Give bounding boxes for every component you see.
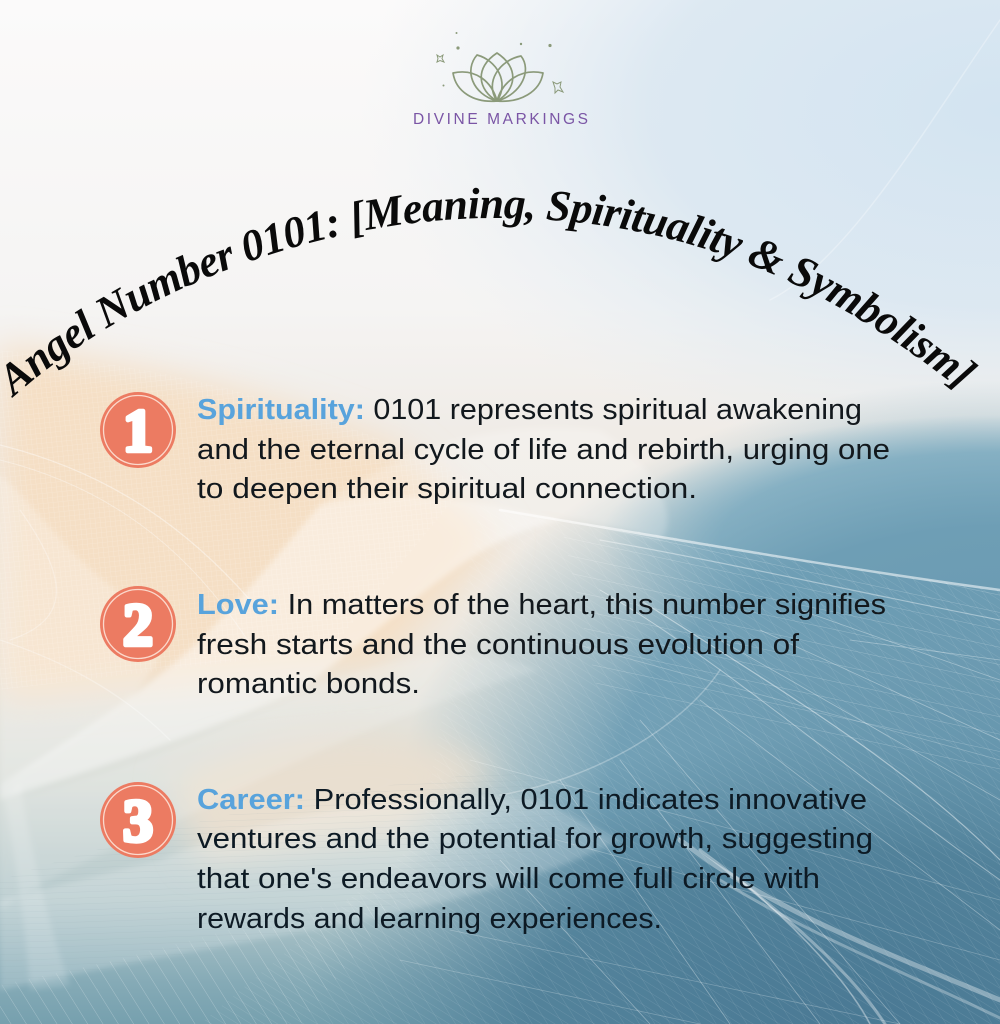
text: career: Career: Professionally, 0101 indicates innovative <box>197 784 824 816</box>
text: love: Love: In matters of the heart, this number signifies <box>197 589 841 621</box>
title on arc: Angel Number 0101: [Meaning, Spirituality & Symbolism] <box>6 188 979 398</box>
item 2: love <box>100 586 894 700</box>
item 1: spirituality <box>100 392 898 505</box>
text: spirituality: and the eternal cycle of life and rebirth, urging one <box>197 434 890 466</box>
text: spirituality: to deepen their spiritual connection. <box>197 473 697 505</box>
text: spirituality: Spirituality: 0101 represents spiritual awakening <box>197 394 829 426</box>
logo wordmark: DIVINE MARKINGS <box>413 111 588 128</box>
badge 2 <box>100 586 176 662</box>
text: love: fresh starts and the continuous evolution of <box>197 629 799 661</box>
grey woven mesh, lower left <box>0 770 620 990</box>
badge 2: 2 <box>123 592 153 658</box>
badge 1: 1 <box>123 398 153 464</box>
logo: Divine Markings <box>413 32 588 128</box>
peach grid texture <box>0 350 470 690</box>
badge 3: 3 <box>123 788 153 854</box>
text: love: romantic bonds. <box>197 668 420 700</box>
icon: sparkles <box>437 32 563 93</box>
badge 3 <box>100 782 176 858</box>
badge 1 <box>100 392 176 468</box>
item 3: career <box>100 782 881 935</box>
icon: lotus flower <box>453 53 543 101</box>
white ribbons <box>0 428 668 990</box>
text: career: ventures and the potential for growth, suggesting <box>197 823 873 855</box>
text: career: rewards and learning experiences. <box>197 903 662 935</box>
fine white line fans, lower right <box>200 505 1000 1024</box>
text: career: that one's endeavors will come full circle with <box>197 863 820 895</box>
